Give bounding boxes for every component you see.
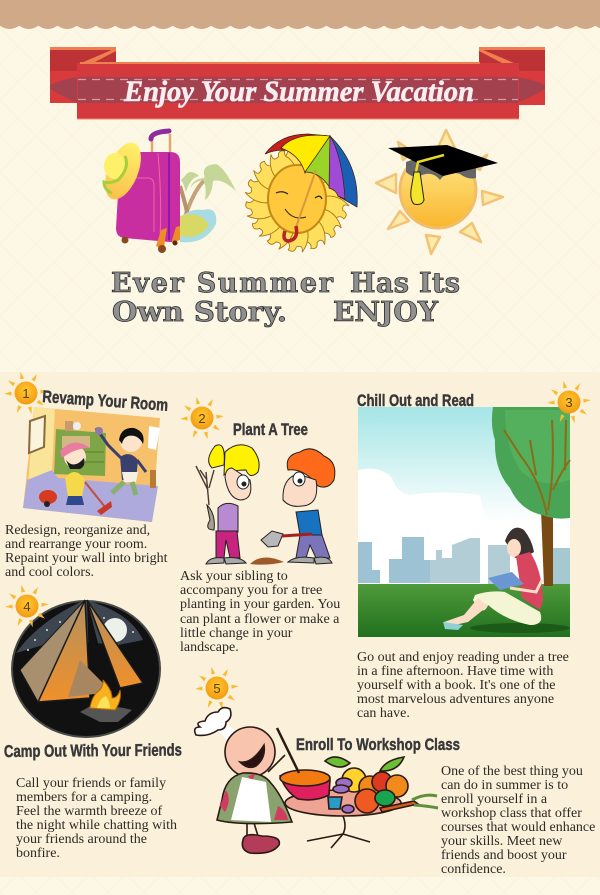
description: Redesign, reorganize and,: [5, 523, 150, 538]
panel: revamp your room: [4, 371, 169, 580]
description: friends and boost your: [441, 848, 567, 863]
description: accompany you for a tree: [180, 583, 322, 598]
description: can do in summer is to: [441, 778, 568, 793]
illustration: chef cooking: [195, 708, 438, 853]
sun badge 4: [5, 584, 49, 628]
description: Call your friends or family: [16, 776, 166, 791]
description: most marvelous adventures anyone: [357, 692, 554, 707]
description: workshop class that offer: [441, 806, 582, 821]
heading: Chill Out and Read: [357, 391, 474, 410]
heading: Camp Out With Your Friends: [4, 740, 182, 761]
description: your skills. Meet new: [441, 834, 563, 849]
sun badge 4: 4: [23, 599, 31, 614]
icon: suitcase with hat and palm: [98, 131, 236, 253]
description: can plant a flower or make a: [180, 612, 340, 627]
sun badge 2: [180, 396, 224, 440]
tagline: Own Story.: [112, 297, 287, 328]
sun badge 3: [547, 380, 591, 424]
description: Ask your sibling to: [180, 569, 288, 584]
sun badge 5: [195, 666, 239, 710]
description: courses that would enhance: [441, 820, 595, 835]
description: and rearrange your room.: [5, 537, 147, 552]
heading: Plant A Tree: [233, 420, 308, 439]
sun badge 3: 3: [565, 395, 573, 410]
illustration: tent and campfire: [12, 600, 160, 737]
girl: [65, 472, 85, 497]
description: yourself with a book. It's one of the: [357, 678, 555, 693]
description: and cool colors.: [5, 565, 94, 580]
panel: chill out and read: [357, 380, 591, 721]
description: bonfire.: [16, 846, 60, 861]
scalloped top band: [0, 0, 600, 32]
illustration: girl reading under a tree: [358, 407, 570, 637]
description: in a fine afternoon. Have time with: [357, 664, 553, 679]
tagline: Has Its: [350, 268, 460, 299]
description: planting in your garden. You: [180, 597, 340, 612]
panel: camp out: [4, 584, 182, 861]
tagline: Ever Summer: [111, 268, 334, 299]
description: members for a camping.: [16, 790, 152, 805]
panel: plant a tree: [180, 396, 340, 655]
tagline: ENJOY: [333, 297, 439, 328]
boy: [120, 430, 142, 452]
heading: Revamp Your Room: [42, 387, 169, 415]
panel: workshop class: [195, 666, 595, 877]
title ribbon: [50, 47, 545, 120]
sun badge 2: 2: [198, 411, 206, 426]
description: Feel the warmth breeze of: [16, 804, 162, 819]
description: the night while chatting with: [16, 818, 177, 833]
description: Go out and enjoy reading under a tree: [357, 650, 569, 665]
heading: Enroll To Workshop Class: [296, 735, 460, 754]
description: your friends around the: [16, 832, 147, 847]
sun badge 1: [4, 371, 48, 415]
illustration: cleaning room: [23, 407, 160, 522]
icon: sun with graduation cap: [376, 130, 503, 254]
description: enroll yourself in a: [441, 792, 548, 807]
title: Enjoy Your Summer Vacation: [123, 75, 474, 108]
description: Repaint your wall into bright: [5, 551, 168, 566]
description: can have.: [357, 706, 410, 721]
illustration: kids planting: [196, 445, 335, 565]
description: One of the best thing you: [441, 764, 583, 779]
sun badge 1: 1: [22, 386, 30, 401]
description: confidence.: [441, 862, 506, 877]
description: landscape.: [180, 640, 239, 655]
sun badge 5: 5: [213, 681, 221, 696]
tagline: [111, 268, 460, 328]
description: little change in your: [180, 626, 293, 641]
icon: sun with umbrella: [244, 134, 357, 252]
